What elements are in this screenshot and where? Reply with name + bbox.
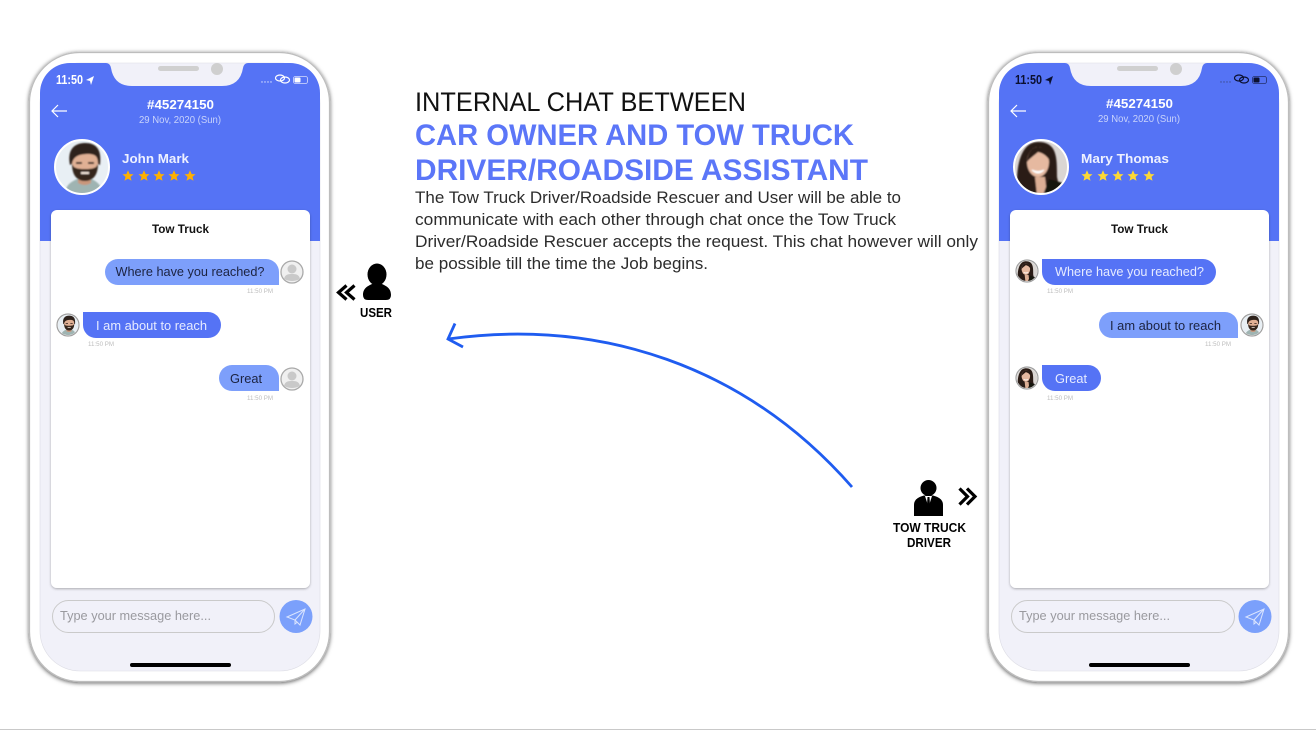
message: where have you reached: Where have you reached?: [116, 264, 264, 279]
message: about to reach: 11:50 PM: [88, 342, 114, 348]
date: 29 Nov, 2020 (Sun): [1098, 114, 1180, 125]
avatar: Mary Thomas: [1013, 139, 1069, 195]
phone: tow truck driver chat: [988, 52, 1288, 682]
status bar: 11:50: [56, 73, 83, 87]
tow truck driver label: [893, 480, 975, 550]
name: Mary Thomas: [1081, 151, 1169, 166]
send button: [280, 600, 312, 633]
message: great: 11:50 PM: [247, 396, 273, 402]
highlighted heading: DRIVER/ROADSIDE ASSISTANT: [415, 154, 868, 187]
highlighted heading: CAR OWNER AND TOW TRUCK: [415, 119, 855, 152]
driver caption: [893, 521, 966, 550]
message: where have you reached: 11:50 PM: [247, 289, 273, 295]
message input: Type your message here...: [60, 608, 211, 623]
message: great: [1016, 365, 1101, 402]
date: 29 Nov, 2020 (Sun): [139, 115, 221, 126]
message: about to reach: I am about to reach: [1110, 318, 1221, 333]
rating stars: [122, 170, 196, 181]
screen body: [999, 63, 1279, 671]
heading line: INTERNAL CHAT BETWEEN: [415, 87, 746, 117]
arrow: driver to user: [448, 324, 852, 487]
message: great: Great: [230, 371, 262, 386]
message: about to reach: 11:50 PM: [1205, 342, 1231, 348]
description: The Tow Truck Driver/Roadside Rescuer and User will be able to: [415, 188, 901, 207]
user caption: USER: [360, 306, 392, 320]
message input: Type your message here...: [1019, 608, 1170, 623]
phone frame: [988, 52, 1288, 682]
title block: [415, 87, 979, 273]
card title: Tow Truck: [1111, 224, 1169, 236]
description: Driver/Roadside Rescuer accepts the request. This chat however will only: [415, 232, 979, 251]
message: where have you reached: 11:50 PM: [1047, 289, 1073, 295]
driver caption: DRIVER: [907, 536, 951, 550]
chat card: [1010, 210, 1269, 588]
status bar: [1015, 73, 1266, 87]
message: great: 11:50 PM: [1047, 396, 1073, 402]
message: about to reach: [1099, 312, 1263, 348]
description: be possible till the time the Job begins.: [415, 254, 708, 273]
name: John Mark: [122, 151, 190, 166]
status bar: 11:50: [1015, 73, 1042, 87]
icon: chevrons right: [960, 488, 975, 504]
message: great: Great: [1055, 371, 1087, 386]
icon: chevrons left: [338, 286, 354, 300]
screen body: [40, 63, 320, 671]
message: where have you reached: [105, 259, 303, 295]
home indicator: [1089, 663, 1190, 667]
message input: [52, 600, 274, 632]
icon: user: [363, 264, 391, 300]
description: communicate with each other through chat once the Tow Truck: [415, 210, 897, 229]
message: where have you reached: Where have you reached?: [1055, 264, 1204, 279]
phone: user chat: [30, 52, 330, 682]
chat card: [51, 210, 310, 588]
card title: Tow Truck: [152, 224, 210, 236]
status bar: [56, 73, 308, 87]
description: [415, 188, 979, 273]
home indicator: [130, 663, 231, 667]
header band: [999, 63, 1279, 241]
message input: [1012, 600, 1234, 632]
back arrow: [52, 105, 67, 117]
send button: [1238, 600, 1272, 633]
phone frame: [30, 52, 330, 682]
job number: #45274150: [147, 97, 214, 112]
header band: [40, 63, 320, 241]
message: great: [219, 365, 303, 402]
back arrow: [1011, 105, 1026, 117]
message: about to reach: I am about to reach: [96, 318, 207, 333]
job number: #45274150: [1106, 96, 1173, 111]
message: about to reach: [57, 312, 221, 348]
notch speaker and camera: [1117, 63, 1182, 75]
icon: driver: [914, 480, 943, 516]
driver caption: TOW TRUCK: [893, 521, 966, 535]
notch speaker and camera: [158, 63, 223, 75]
user label: [338, 264, 392, 320]
rating stars: [1082, 170, 1154, 181]
highlighted heading: [415, 119, 868, 187]
message: where have you reached: [1016, 259, 1216, 295]
avatar: John Mark: [54, 139, 110, 195]
